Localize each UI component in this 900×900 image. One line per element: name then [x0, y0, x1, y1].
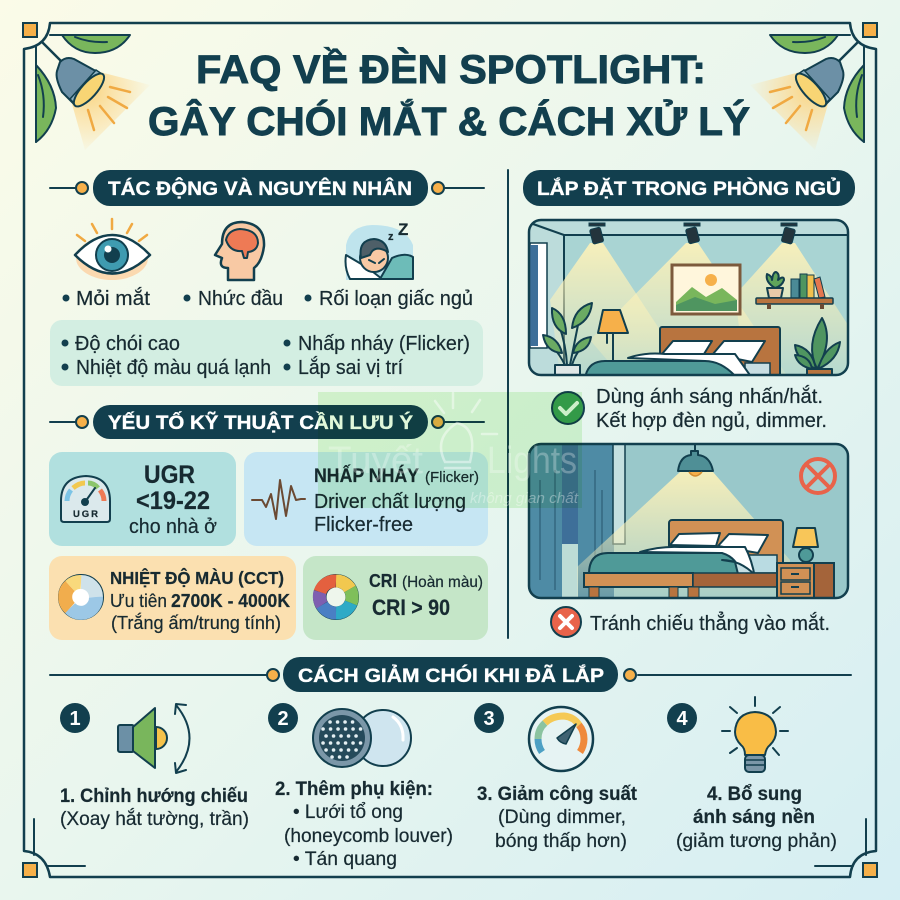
step 4: 4. Bổ sung	[707, 784, 802, 805]
icon: green check	[552, 392, 584, 424]
badge 4: 4	[676, 708, 688, 730]
card: UGR: UGR	[144, 461, 195, 489]
step 4: (giảm tương phản)	[676, 831, 837, 852]
title: FAQ VỀ ĐÈN SPOTLIGHT:	[196, 46, 706, 92]
watermark: không gian chất	[470, 490, 579, 507]
step 1: 1. Chỉnh hướng chiếu	[60, 786, 248, 807]
step 3	[474, 703, 638, 852]
icon: sleeping person: Z	[398, 220, 408, 239]
step 1	[60, 703, 249, 830]
icon: red cross	[551, 607, 581, 637]
icon: spotlight top right	[750, 35, 864, 150]
card: UGR: cho nhà ở	[129, 516, 217, 538]
heading: tác động và nguyên nhân	[50, 170, 484, 206]
heading: tác động và nguyên nhân: TÁC ĐỘNG VÀ NGUYÊN NHÂN	[108, 176, 412, 200]
framed picture	[672, 265, 740, 314]
card: UGR	[49, 452, 236, 546]
panel: causes: Nhấp nháy (Flicker)	[298, 333, 470, 355]
badge 2: 2	[277, 708, 289, 730]
card: flicker: Flicker-free	[314, 513, 413, 536]
badge 2	[268, 703, 298, 733]
badge 4	[667, 703, 697, 733]
step 2: 2. Thêm phụ kiện:	[275, 779, 433, 800]
heading: cách giảm chói: CÁCH GIẢM CHÓI KHI ĐÃ LẮP	[298, 663, 604, 687]
card: flicker	[244, 452, 488, 546]
card: colour temperature: NHIỆT ĐỘ MÀU (CCT)	[110, 567, 284, 588]
card: UGR: <19-22	[136, 487, 210, 515]
panel: causes: Lắp sai vị trí	[298, 356, 403, 379]
bed	[585, 327, 780, 378]
step 2	[268, 703, 453, 870]
icon: eye	[75, 219, 150, 280]
card: flicker: (Flicker)	[425, 469, 479, 486]
step 4: ánh sáng nền	[693, 807, 815, 828]
step 2: • Lưới tổ ong	[293, 802, 403, 823]
icon: sleeping person: z	[388, 231, 394, 243]
step 4	[667, 697, 837, 852]
illustration: bedroom to avoid	[529, 444, 848, 600]
column divider	[507, 170, 509, 638]
symptom labels: Nhức đầu	[198, 288, 283, 310]
icon: light bulb	[722, 697, 788, 772]
watermark	[318, 392, 582, 508]
plant right	[795, 318, 840, 377]
illustration: recommended bedroom	[529, 220, 848, 380]
icon: CCT ring	[59, 575, 103, 619]
symptom labels: Mỏi mắt	[76, 287, 150, 310]
panel: causes: Độ chói cao	[75, 333, 180, 355]
bed	[584, 520, 783, 600]
heading: yếu tố kỹ thuật	[50, 405, 484, 439]
title: GÂY CHÓI MẮT & CÁCH XỬ LÝ	[148, 98, 750, 144]
icon: UGR gauge: UGR	[73, 509, 98, 520]
shelf with books	[756, 272, 833, 309]
card: CRI: CRI > 90	[372, 595, 450, 620]
card: flicker: Driver chất lượng	[314, 490, 466, 513]
step 3: 3. Giảm công suất	[477, 784, 638, 805]
icon: UGR gauge	[61, 476, 110, 522]
step 1: (Xoay hắt tường, trần)	[60, 808, 249, 830]
floor lamp	[598, 310, 628, 362]
heading: lắp đặt trong phòng ngủ: LẮP ĐẶT TRONG PHÒNG NGỦ	[537, 176, 841, 200]
nightstand and lamp	[777, 528, 834, 599]
icon: sleeping person	[346, 220, 413, 280]
icon: head with brain	[215, 222, 264, 280]
badge 1	[60, 703, 90, 733]
icon: aim spotlight	[118, 704, 190, 773]
symptom labels: Rối loạn giấc ngủ	[319, 288, 473, 310]
card: colour temperature: 2700K - 4000K	[171, 591, 290, 611]
plant left	[543, 303, 592, 377]
icon: louver and diffuser	[313, 709, 411, 767]
card: colour temperature	[49, 556, 296, 640]
step 3: (Dùng dimmer,	[498, 807, 626, 828]
recommendation text: Kết hợp đèn ngủ, dimmer.	[596, 409, 827, 432]
step 2: (honeycomb louver)	[284, 826, 453, 847]
heading: yếu tố kỹ thuật: YẾU TỐ KỸ THUẬT CẦN LƯU Ý	[108, 410, 413, 434]
panel: causes	[50, 320, 483, 386]
heading: cách giảm chói	[50, 657, 851, 692]
pendant lamp	[678, 444, 713, 476]
card: CRI: CRI	[369, 571, 397, 591]
card: CRI: (Hoàn màu)	[402, 574, 483, 591]
prohibited sign	[801, 459, 835, 493]
card: flicker: NHẤP NHÁY	[314, 465, 419, 487]
badge 3: 3	[483, 708, 495, 730]
step 2: • Tán quang	[293, 849, 397, 870]
warning text: Tránh chiếu thẳng vào mắt.	[590, 611, 830, 635]
rail and spot heads	[589, 223, 797, 244]
curtain and window	[529, 444, 625, 598]
watermark: Tuyết	[328, 440, 423, 482]
panel: causes: Nhiệt độ màu quá lạnh	[76, 357, 271, 379]
badge 3	[474, 703, 504, 733]
icon: dimmer gauge	[529, 707, 593, 771]
heading: lắp đặt trong phòng ngủ	[523, 170, 855, 206]
badge 1: 1	[69, 708, 81, 730]
card: CRI	[303, 556, 488, 640]
recommendation text	[596, 385, 827, 432]
icon: flicker wave	[252, 480, 305, 519]
recommendation text: Dùng ánh sáng nhấn/hắt.	[596, 385, 823, 408]
watermark: Lights	[487, 440, 577, 482]
title	[148, 46, 750, 144]
card: colour temperature: Ưu tiên	[110, 591, 167, 611]
icon: CRI colour wheel	[313, 574, 359, 620]
step 3: bóng thấp hơn)	[495, 831, 627, 852]
symptom labels	[62, 287, 473, 310]
icon: spotlight top left	[36, 35, 150, 150]
card: colour temperature: (Trắng ấm/trung tính)	[111, 612, 281, 633]
